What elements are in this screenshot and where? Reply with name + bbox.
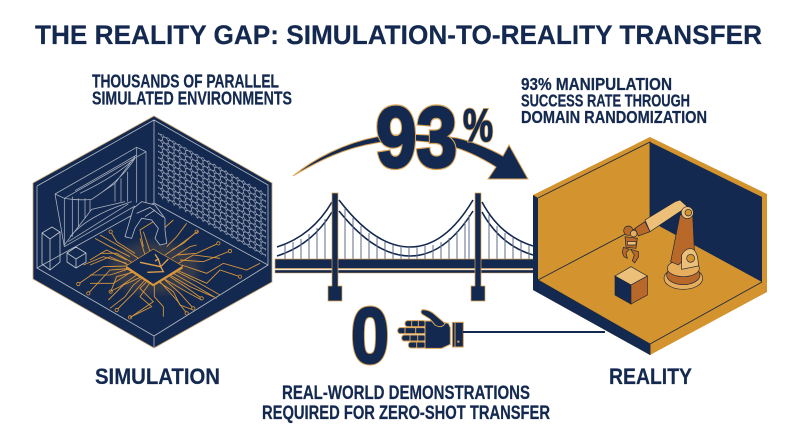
fingers — [398, 321, 426, 348]
room edges — [37, 120, 268, 348]
panel: reality room — [533, 137, 767, 355]
arrow: 93 percent transfer arc — [293, 134, 528, 179]
bridge cables — [277, 200, 533, 256]
simulated robot arm — [125, 202, 167, 245]
statistic: zero: 0 — [351, 290, 389, 380]
text: parallel simulated environments: THOUSANDS OF PARALLEL — [92, 72, 279, 92]
central chip — [126, 249, 183, 286]
text: real-world demonstrations — [262, 383, 550, 424]
icon: robot hand — [398, 310, 463, 348]
bridge — [275, 193, 535, 301]
thumb — [421, 310, 445, 327]
text: manipulation success rate: DOMAIN RANDOMIZATION — [521, 107, 707, 127]
text: real-world demonstrations: REQUIRED FOR ZERO-SHOT TRANSFER — [262, 403, 550, 424]
upper arm — [645, 200, 687, 232]
connector line from hand — [463, 331, 605, 333]
bridge tower left — [328, 193, 342, 301]
text: manipulation success rate: SUCCESS RATE THROUGH — [521, 90, 690, 110]
circuit traces outer — [77, 220, 260, 319]
robot arm — [615, 200, 703, 304]
back right wall — [650, 142, 762, 282]
title: THE REALITY GAP: SIMULATION-TO-REALITY TRANSFER — [35, 20, 762, 50]
simulated tower box — [42, 227, 60, 270]
vertical arm link — [671, 215, 694, 265]
statistic: zero: 0 — [351, 290, 389, 380]
label: reality: REALITY — [609, 364, 692, 389]
label: simulation: SIMULATION — [95, 364, 220, 389]
bridge hangers — [285, 208, 529, 259]
gripper — [622, 226, 639, 263]
statistic: 93 percent: % — [463, 99, 493, 151]
simulated cube — [67, 247, 86, 268]
arm base — [664, 260, 703, 289]
text: manipulation success rate — [521, 74, 707, 127]
panel: simulation room — [33, 116, 272, 348]
elbow joint — [681, 207, 693, 219]
navy left edge — [533, 195, 650, 355]
text: real-world demonstrations: REAL-WORLD DEMONSTRATIONS — [282, 383, 530, 404]
text: parallel simulated environments — [92, 72, 292, 108]
circuit traces near chip — [90, 231, 220, 318]
wall of parallel environments — [158, 132, 266, 257]
bridge deck — [275, 259, 535, 268]
room shell — [33, 116, 272, 348]
room edge lines — [538, 142, 762, 355]
text: manipulation success rate: 93% MANIPULATION — [521, 74, 672, 94]
outer shell — [533, 137, 767, 355]
palm — [425, 321, 450, 348]
circuit glow — [109, 242, 199, 294]
statistic: 93 percent: % — [463, 99, 493, 151]
statistic: 93 percent: 93 — [376, 90, 457, 186]
cube — [615, 267, 647, 304]
bridge tower right — [471, 193, 485, 301]
simulated screen frames — [55, 147, 146, 247]
cuff — [452, 322, 463, 347]
statistic: 93 percent: 93 — [376, 90, 457, 186]
forearm — [635, 222, 650, 236]
shoulder plate — [682, 249, 698, 269]
text: parallel simulated environments: SIMULATED ENVIRONMENTS — [92, 88, 292, 108]
